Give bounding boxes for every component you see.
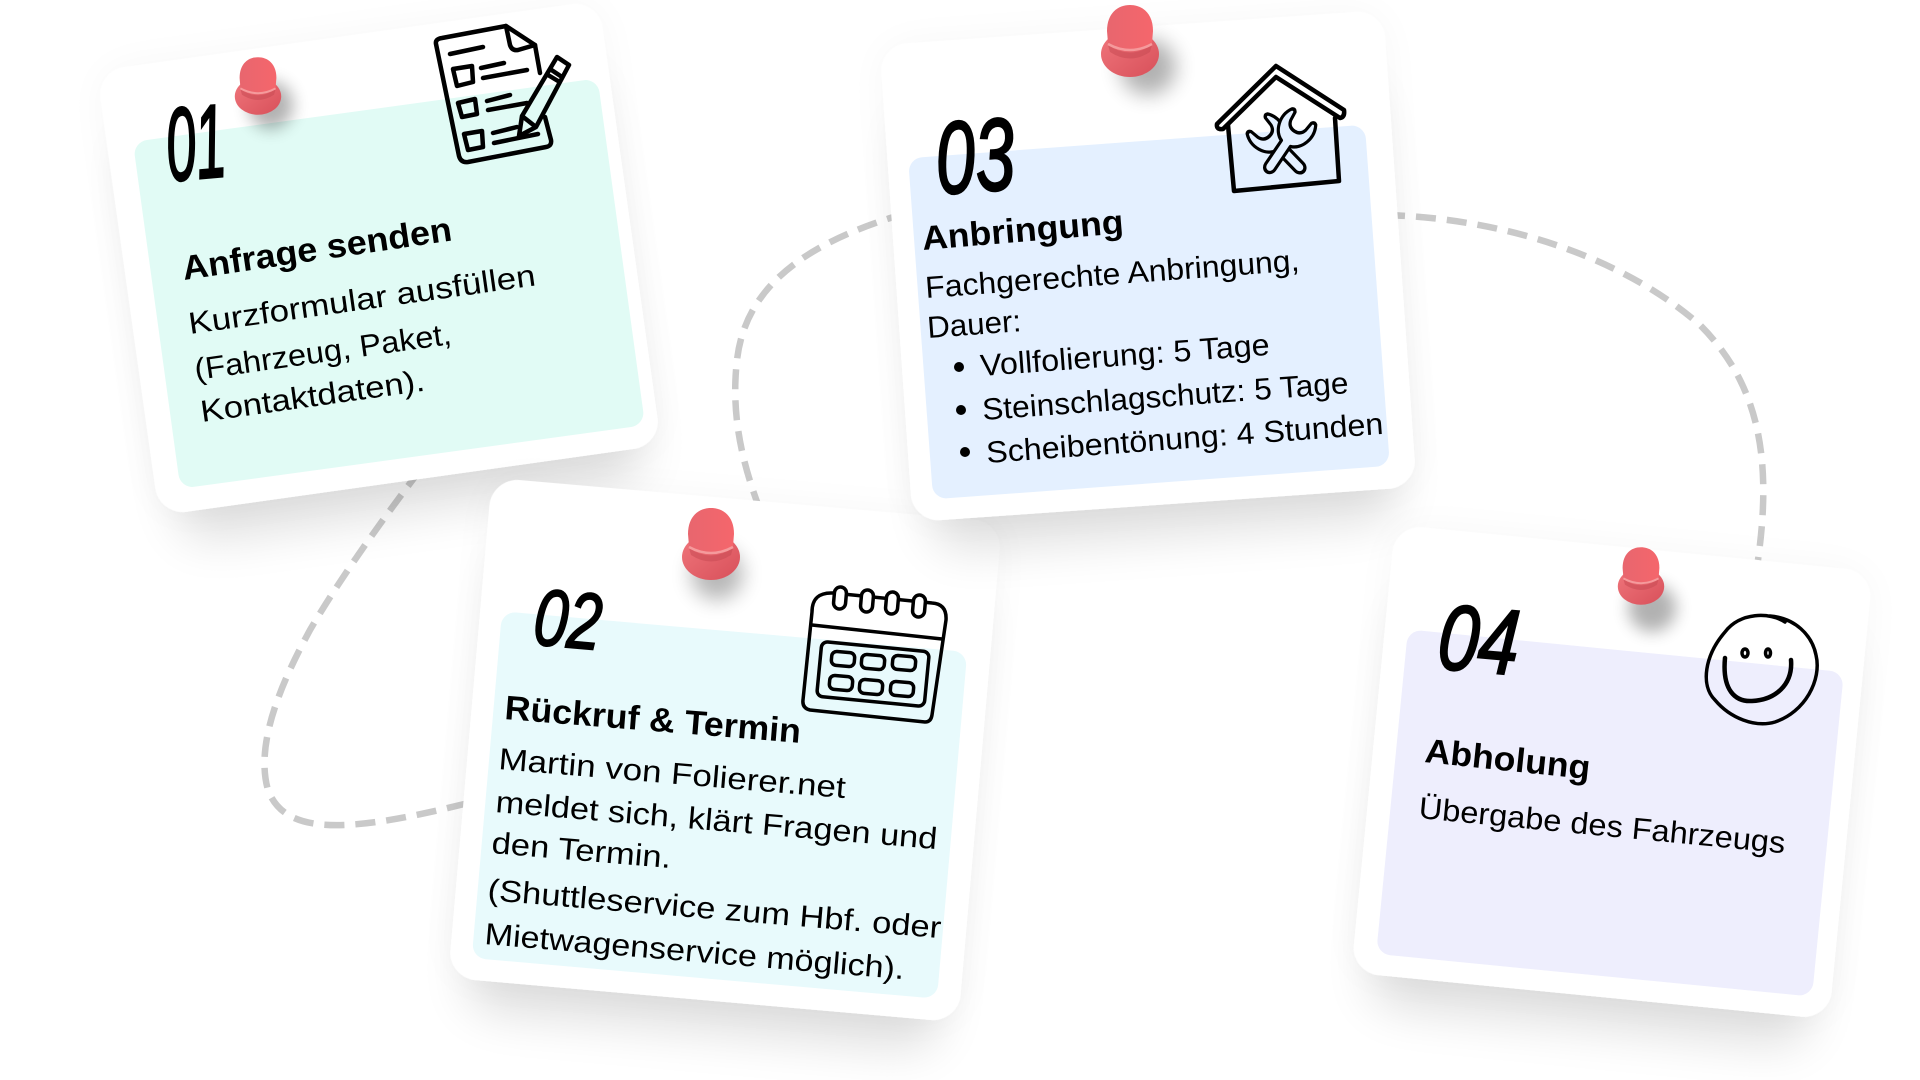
card backing 03: [879, 10, 1417, 522]
dashed connector: 01 to 02: [264, 470, 480, 825]
icon: push pin 02: [682, 508, 743, 600]
body text 02: den Termin.: [490, 826, 673, 875]
body text 01: [186, 259, 538, 429]
step number 03: 03: [932, 96, 1018, 216]
body text 03: Steinschlagschutz: 5 Tage: [981, 366, 1350, 427]
coloured area 01: [133, 78, 645, 489]
step number 02: 02: [530, 573, 605, 668]
heading: Anfrage senden: Anfrage senden: [180, 211, 454, 288]
heading: Anbringung: Anbringung: [920, 203, 1125, 258]
heading: Rückruf & Termin: Rückruf & Termin: [503, 689, 802, 751]
coloured area 04: [1376, 629, 1844, 997]
coloured area 03: [908, 125, 1390, 499]
panel: step 03 card: [879, 5, 1417, 522]
card backing 01: [97, 0, 661, 516]
body text 02: (Shuttleservice zum Hbf. oder: [486, 873, 943, 945]
body text 02: Mietwagenservice möglich).: [483, 917, 906, 986]
body text 03: Vollfolierung: 5 Tage: [979, 328, 1271, 383]
body text 01: Kontaktdaten).: [198, 364, 427, 429]
body text 03: Dauer:: [926, 304, 1022, 345]
body text 02: [483, 742, 943, 986]
body text 01: (Fahrzeug, Paket,: [192, 317, 453, 387]
body text 04: Übergabe des Fahrzeugs: [1417, 791, 1787, 860]
body text 02: meldet sich, klärt Fragen und: [494, 785, 939, 856]
icon: push pin 03: [1101, 5, 1176, 95]
body text 03: Fachgerechte Anbringung,: [924, 244, 1301, 305]
step number 04: 04: [1434, 585, 1524, 695]
coloured area 02: [472, 611, 967, 999]
card backing 04: [1351, 525, 1873, 1019]
body text 02: Martin von Folierer.net: [497, 742, 848, 805]
body text 01: Kurzformular ausfüllen: [186, 259, 538, 341]
dashed connector: 02 to 03: [735, 215, 900, 510]
icon: smiley: [1706, 615, 1817, 724]
body text 03: Scheibentönung: 4 Stunden: [985, 407, 1384, 470]
icon: house with tools: [1217, 66, 1344, 191]
body text 03: [924, 244, 1384, 470]
icon: push pin 04: [1618, 547, 1676, 632]
panel: step 02 card: [448, 478, 1002, 1022]
card backing 02: [448, 478, 1002, 1022]
heading: Abholung: Abholung: [1423, 732, 1592, 787]
dashed connector: 03 to 04: [1385, 215, 1763, 560]
icon: push pin 01: [235, 57, 293, 129]
panel: step 04 card: [1351, 525, 1873, 1019]
icon: checklist with pencil: [436, 26, 569, 162]
step number 01: 01: [161, 83, 230, 204]
icon: calendar: [803, 587, 946, 722]
panel: step 01 card: [97, 0, 661, 516]
